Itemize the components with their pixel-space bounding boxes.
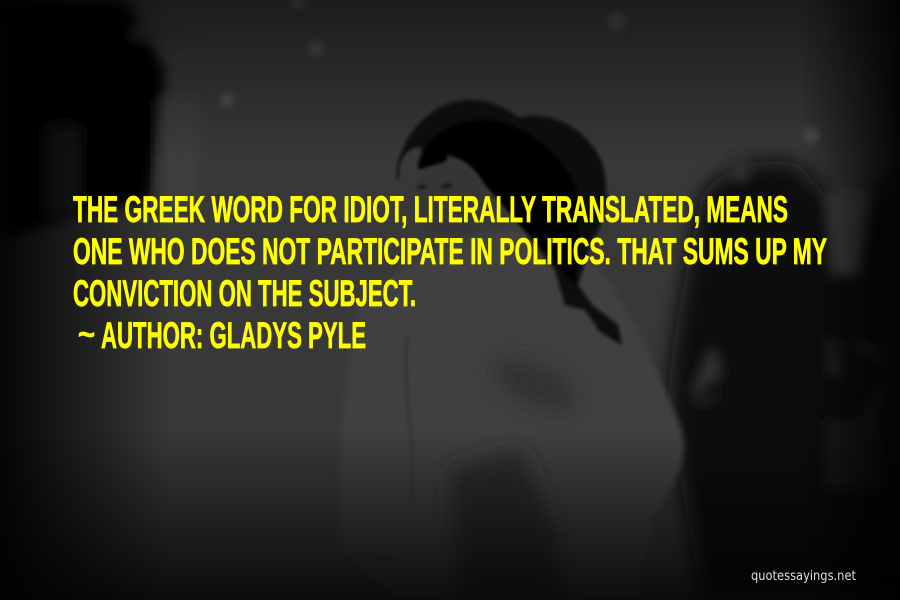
quote text xyxy=(73,189,827,314)
face of front child xyxy=(417,160,485,232)
face of rear child xyxy=(399,147,421,195)
tilde icon: ~ xyxy=(78,316,95,352)
children figure: coat xyxy=(341,228,684,600)
author name: AUTHOR: GLADYS PYLE xyxy=(101,315,366,356)
dark doorway upper left xyxy=(0,0,200,240)
coat shading xyxy=(450,348,584,600)
background bokeh lights xyxy=(220,0,863,143)
hair of front child xyxy=(418,120,580,285)
dark crowd on the right xyxy=(668,161,900,600)
hair of rear child xyxy=(397,100,622,345)
coat sleeve seam xyxy=(350,335,412,558)
quote line 3: CONVICTION ON THE SUBJECT. xyxy=(73,273,416,314)
side vignettes xyxy=(0,0,900,160)
watermark: quotessayings.net xyxy=(751,569,856,584)
author attribution xyxy=(78,315,366,356)
